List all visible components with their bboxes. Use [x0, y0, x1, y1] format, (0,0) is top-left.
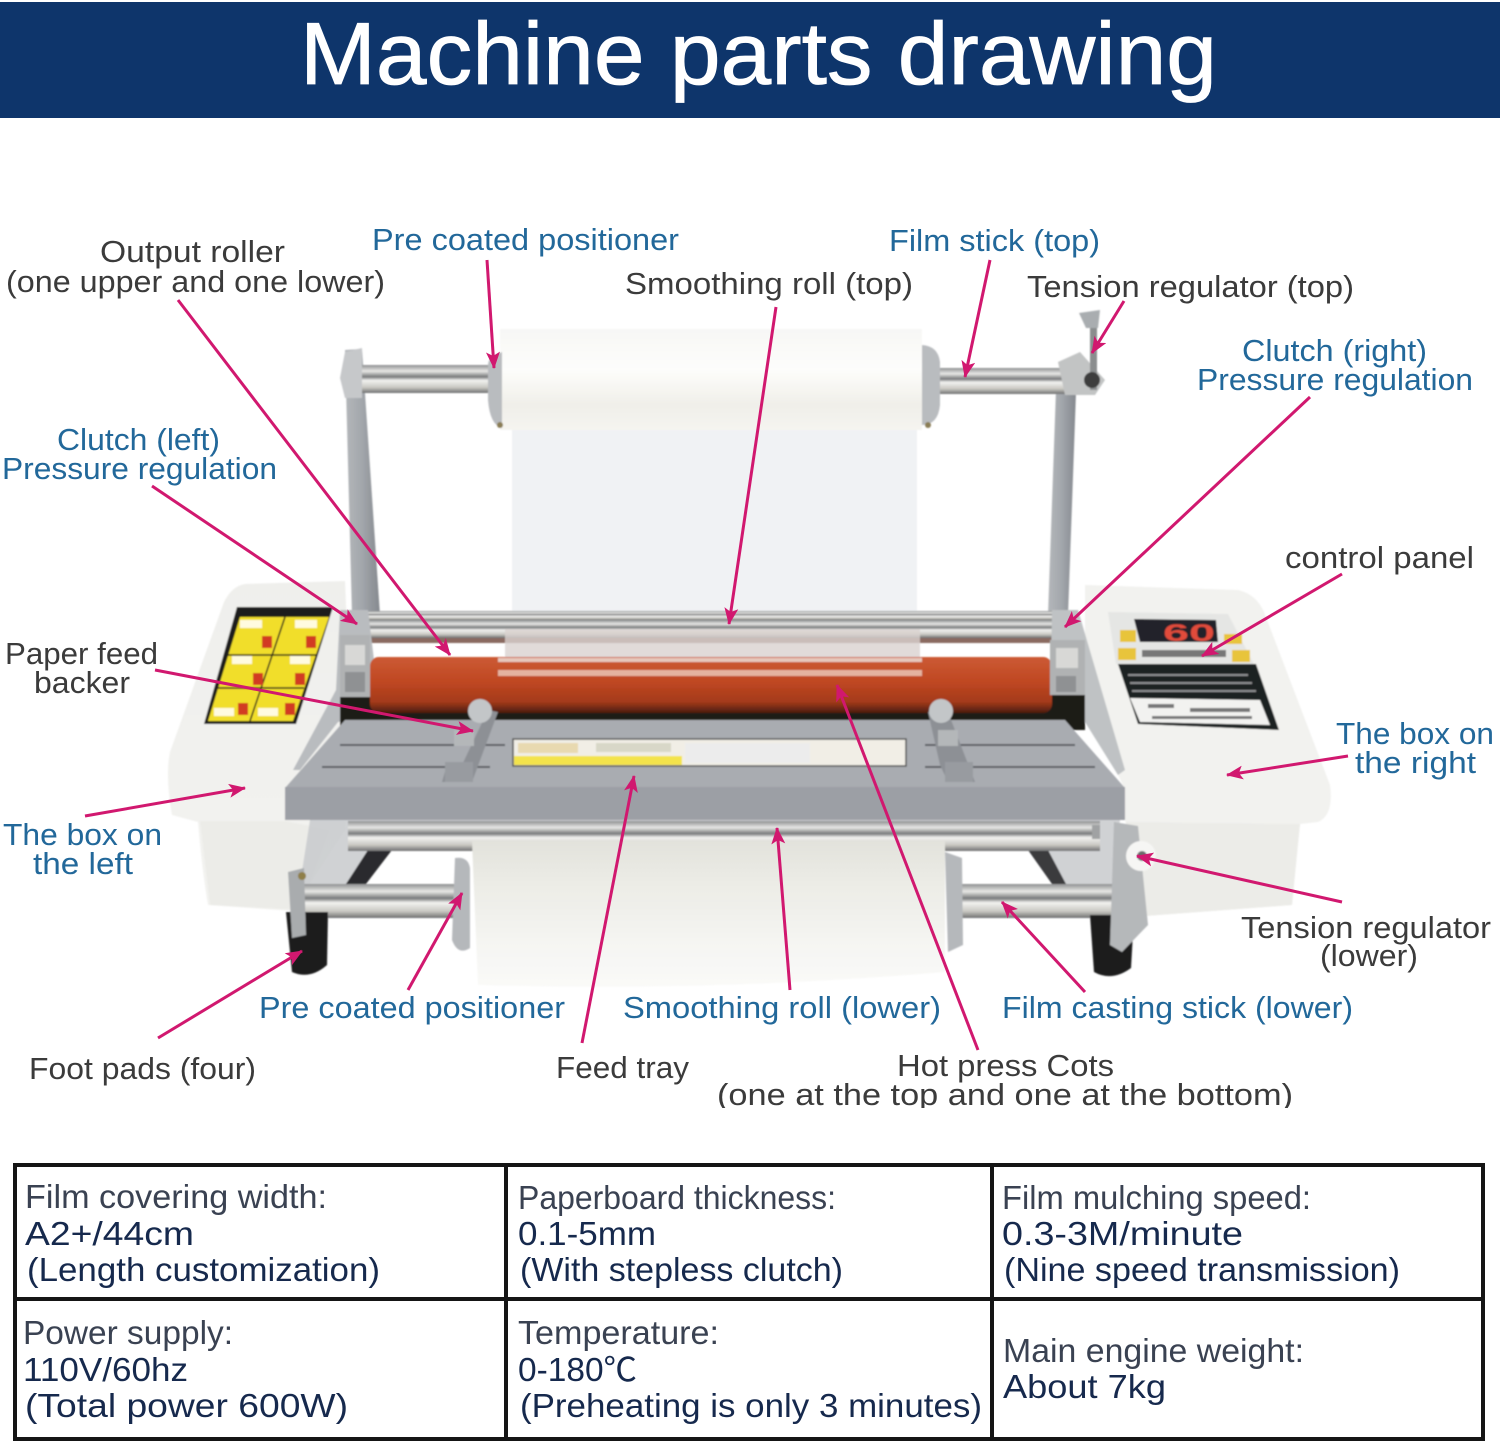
- arrow: tension regulator lower: [1137, 856, 1342, 902]
- label: clutch right: [1197, 333, 1473, 397]
- upper smoothing rods: [362, 611, 1057, 643]
- label: control panel: control panel: [1285, 540, 1474, 575]
- top left shaft: [352, 365, 490, 393]
- red hot press roller: [370, 657, 1052, 713]
- under-tray frame: [300, 820, 1120, 884]
- label: output roller: Output roller: [100, 234, 285, 269]
- tray top: [285, 720, 1125, 788]
- label: pre coated positioner top: Pre coated positioner: [372, 222, 679, 257]
- cell: film mulching speed: [1002, 1179, 1400, 1288]
- label: film stick top: Film stick (top): [889, 223, 1100, 258]
- arrow: output roller: [178, 300, 450, 655]
- cell: film covering width: A2+/44cm: [25, 1215, 194, 1252]
- label: smoothing roll top: Smoothing roll (top): [625, 266, 913, 301]
- cell: power supply: (Total power 600W): [25, 1387, 348, 1424]
- left upright post: [345, 349, 380, 615]
- label: hot press cots: (one at the top and one at the bottom): [717, 1077, 1293, 1112]
- label: paper feed backer: Paper feed: [5, 636, 158, 671]
- label: film casting stick lower: Film casting stick (lower): [1002, 990, 1353, 1025]
- right clutch assembly: [1050, 640, 1085, 695]
- arrow: film casting stick lower: [1002, 902, 1085, 992]
- label: hot press cots: Hot press Cots: [897, 1048, 1114, 1083]
- yellow warning panel: [204, 607, 333, 724]
- label: box on the left: the left: [33, 846, 133, 881]
- top right shaft: [938, 368, 1083, 394]
- label: clutch left: [2, 422, 277, 486]
- label: smoothing roll lower: Smoothing roll (lower): [623, 990, 941, 1025]
- paper feed bracket right: [928, 699, 975, 782]
- tray front: [285, 787, 1125, 820]
- arrow: control panel: [1202, 574, 1342, 656]
- cell: main engine weight: Main engine weight:: [1003, 1332, 1304, 1369]
- lower shafts: [302, 884, 1115, 918]
- arrow: foot pads: [158, 951, 302, 1038]
- arrow: box on the left: [85, 788, 245, 816]
- cell: power supply: Power supply:: [23, 1314, 233, 1351]
- arrow: paper feed backer: [155, 670, 473, 731]
- right upright post: [1048, 390, 1076, 615]
- arrow: smoothing roll top: [729, 307, 776, 624]
- title: Machine parts drawing: [300, 4, 1217, 103]
- cell: paperboard thickness: (With stepless clutch): [520, 1251, 843, 1288]
- arrow: feed tray: [582, 776, 634, 1043]
- arrow: clutch right: [1065, 397, 1310, 627]
- label: output roller: [6, 234, 385, 299]
- arrow: box on the right: [1227, 756, 1348, 775]
- left side box: [168, 581, 350, 911]
- label: clutch left: Clutch (left): [57, 422, 220, 457]
- film over roller: [498, 629, 922, 676]
- label: clutch right: Clutch (right): [1242, 333, 1427, 368]
- left side plate: [293, 610, 374, 770]
- top film roll: [500, 329, 922, 430]
- label: tension regulator lower: (lower): [1320, 938, 1418, 973]
- right side plate: [1050, 610, 1125, 775]
- arrow: tension regulator top: [1092, 301, 1124, 353]
- digital display: 60: [1163, 620, 1215, 647]
- tension knob top: [1058, 310, 1105, 395]
- cell: paperboard thickness: Paperboard thickness:: [518, 1179, 836, 1216]
- label: box on the right: [1336, 716, 1494, 780]
- part labels: [2, 222, 1494, 1112]
- label: box on the left: [3, 817, 162, 881]
- arrow: smoothing roll lower: [777, 828, 790, 990]
- arrow: clutch left: [152, 486, 357, 624]
- label: hot press cots: [717, 1048, 1293, 1112]
- cell: paperboard thickness: 0.1-5mm: [518, 1215, 656, 1252]
- left lower bracket: [288, 868, 306, 938]
- label: output roller: (one upper and one lower): [6, 264, 385, 299]
- right lower bracket and knob: [1092, 822, 1156, 952]
- cell: paperboard thickness: [518, 1179, 843, 1288]
- cell: film covering width: (Length customization): [27, 1251, 380, 1288]
- label: clutch left: Pressure regulation: [2, 451, 277, 486]
- cell: main engine weight: [1003, 1332, 1304, 1405]
- cell: film covering width: Film covering width:: [25, 1178, 327, 1215]
- label: tension regulator lower: Tension regulator: [1241, 910, 1491, 945]
- label: box on the left: The box on: [3, 817, 162, 852]
- tray sticker: [513, 739, 906, 766]
- cell: film mulching speed: 0.3-3M/minute: [1002, 1215, 1243, 1252]
- dark gap behind roller: [340, 695, 1085, 730]
- pointer arrows: [85, 260, 1348, 1050]
- top roll flanges: [488, 345, 940, 428]
- cell: film mulching speed: (Nine speed transmission): [1004, 1251, 1400, 1288]
- cell: temperature: [518, 1314, 982, 1424]
- control panel: [1108, 612, 1279, 730]
- right side box: [1085, 585, 1331, 916]
- label: clutch right: Pressure regulation: [1197, 362, 1473, 397]
- cell: power supply: [23, 1314, 348, 1424]
- left top bracket: [340, 348, 362, 398]
- specification table: [15, 1165, 1483, 1439]
- paper feed bracket left: [442, 699, 498, 782]
- label: pre coated positioner lower: Pre coated positioner: [259, 990, 565, 1025]
- feet: [286, 912, 1134, 976]
- label: feed tray: Feed tray: [556, 1050, 690, 1085]
- cell: temperature: Temperature:: [518, 1314, 719, 1351]
- cell: temperature: (Preheating is only 3 minutes): [520, 1387, 982, 1424]
- arrow: pre coated positioner top: [487, 260, 494, 368]
- left clutch assembly: [340, 635, 370, 697]
- label: box on the right: The box on: [1336, 716, 1494, 751]
- arrow: pre coated positioner lower: [408, 893, 462, 990]
- label: paper feed backer: [5, 636, 158, 700]
- cell: film covering width: [25, 1178, 380, 1288]
- arrow: film stick top: [965, 260, 990, 377]
- label: tension regulator top: Tension regulator (top): [1027, 269, 1354, 304]
- tray slots: [322, 745, 1095, 767]
- lower smoothing shaft: [348, 821, 1100, 851]
- cell: power supply: 110V/60hz: [23, 1351, 188, 1388]
- arrow: hot press cots: [837, 685, 978, 1050]
- lower film roll: [472, 841, 945, 987]
- label: box on the right: the right: [1355, 745, 1476, 780]
- film sheet: [512, 428, 917, 618]
- cell: film mulching speed: Film mulching speed:: [1002, 1179, 1311, 1216]
- label: paper feed backer: backer: [34, 665, 130, 700]
- cell: main engine weight: About 7kg: [1003, 1368, 1166, 1405]
- cell: temperature: 0-180℃: [518, 1351, 637, 1388]
- machine illustration: [168, 310, 1331, 987]
- label: foot pads: Foot pads (four): [29, 1051, 256, 1086]
- header banner: [0, 2, 1500, 118]
- digital display: [1134, 619, 1218, 647]
- label: tension regulator lower: [1241, 910, 1491, 973]
- lower flanges: [452, 852, 963, 952]
